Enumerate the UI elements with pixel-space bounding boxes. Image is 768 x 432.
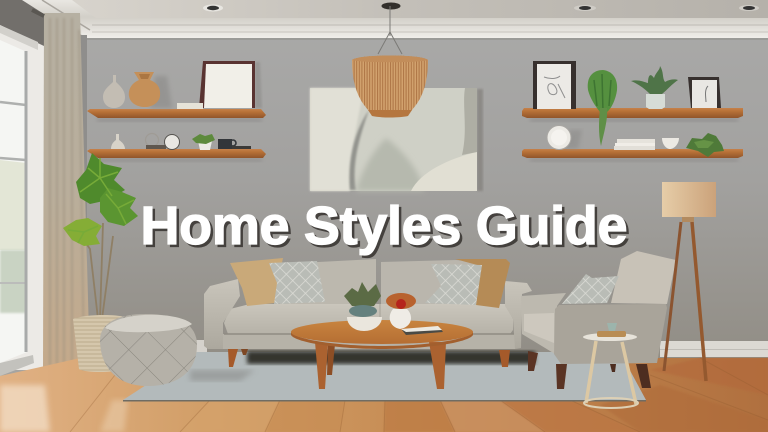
crown molding <box>20 0 768 40</box>
floor <box>0 358 768 432</box>
armchair <box>521 251 676 389</box>
pendant lamp <box>352 2 428 118</box>
top right shelf <box>522 108 743 122</box>
sofa pillows <box>230 258 510 308</box>
second right shelf <box>522 149 743 162</box>
curtain <box>32 10 90 369</box>
coffee table <box>291 320 473 389</box>
sofa <box>204 259 532 367</box>
shelf items second left <box>111 134 251 150</box>
tufted pouf <box>100 314 197 386</box>
rug <box>123 351 646 402</box>
centerpiece items <box>344 282 443 335</box>
shelf items second right <box>547 126 724 157</box>
ceiling spotlights <box>203 4 759 12</box>
wall art <box>310 88 483 191</box>
title text: Home Styles Guide <box>140 196 628 256</box>
shelf items top left <box>103 61 262 109</box>
woven planter <box>73 315 125 372</box>
plant leaves <box>63 153 138 246</box>
window <box>0 25 38 376</box>
second left shelf <box>87 149 266 162</box>
top left shelf <box>87 109 266 122</box>
plant stems <box>83 223 113 319</box>
shelf items top right <box>533 61 721 146</box>
title shadow: Home Styles Guide <box>143 198 630 258</box>
ceiling <box>0 0 768 20</box>
side wall <box>0 0 87 370</box>
baseboard <box>195 340 768 357</box>
side table <box>583 323 638 408</box>
floor lamp <box>662 182 716 381</box>
